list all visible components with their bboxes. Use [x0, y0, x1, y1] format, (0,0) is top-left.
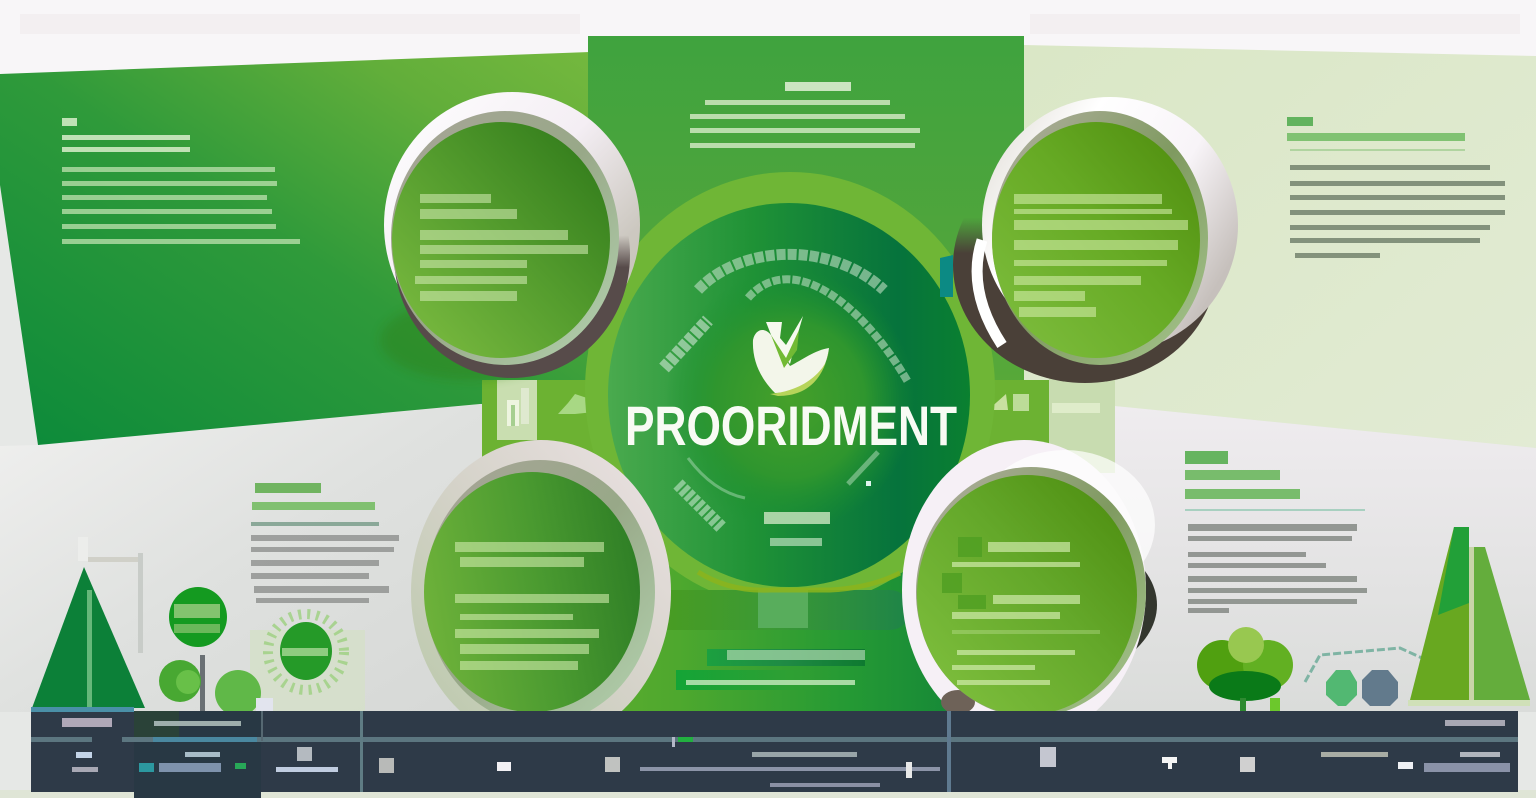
circle: top left	[380, 92, 640, 380]
side chart icons	[497, 380, 1100, 440]
icon: leaf check	[753, 316, 829, 396]
panel: lower right gray	[1000, 406, 1536, 712]
illustration: left tree triangle	[32, 537, 145, 708]
arc text: lower ring	[678, 452, 878, 546]
circle: top right	[953, 97, 1238, 383]
illustration: right hexagons	[1305, 648, 1422, 706]
footer icons right	[1040, 720, 1510, 772]
panel: lower left gray	[0, 404, 482, 712]
central ring and hub	[585, 172, 995, 630]
text: bottom right circle	[942, 537, 1100, 685]
arc text: upper ring	[664, 254, 908, 382]
arrow tab: teal edge	[940, 255, 953, 297]
panel: top centre green	[588, 36, 1024, 436]
text: top left body	[62, 167, 300, 244]
pale strip beside centre	[1049, 378, 1115, 473]
text: lower left panel	[251, 483, 399, 603]
circle: bottom left	[411, 440, 671, 744]
text: top right panel	[1287, 117, 1505, 258]
circle: bottom right	[902, 440, 1157, 740]
text: top right circle	[1014, 194, 1188, 317]
text: top left circle	[415, 194, 588, 301]
panel: top right pale	[1024, 45, 1536, 470]
panel: lower centre green	[482, 380, 1049, 475]
text: top left heading	[62, 118, 190, 152]
panel: lower centre base	[482, 470, 1042, 712]
text: top centre block	[690, 82, 920, 148]
footer icons centre	[379, 757, 620, 773]
text: bottom left circle	[455, 542, 609, 670]
illustration: right clover	[1197, 627, 1293, 711]
footer labels left	[62, 718, 338, 772]
title: PROORIDMENT	[625, 394, 957, 457]
panel: top left green	[0, 52, 590, 445]
footer text centre	[640, 752, 940, 787]
footer bar	[31, 707, 1518, 798]
centre label bars	[676, 649, 865, 690]
illustration: left circles and trees	[159, 587, 365, 716]
text: lower right panel	[1185, 451, 1367, 613]
illustration: right triangle	[1408, 527, 1530, 706]
